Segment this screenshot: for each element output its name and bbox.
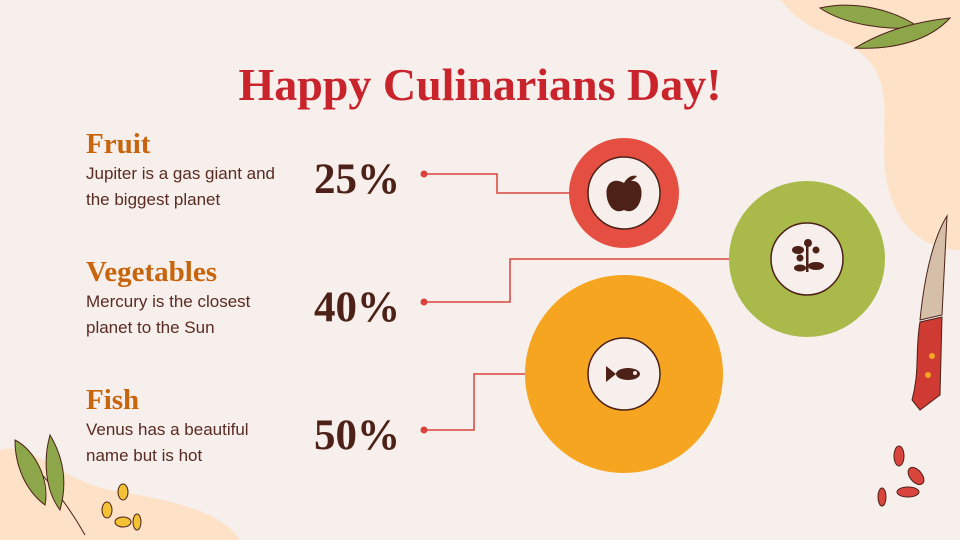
icon: plant [792,239,824,272]
percentage 50: 50% [314,412,400,459]
text block: fish: Venus has a beautiful [86,420,249,439]
text block: fish: name but is hot [86,446,202,465]
text block: fruit: Fruit [86,128,150,160]
text block: vegetables: Mercury is the closest [86,292,250,311]
text block: fish [86,384,249,465]
text block: fruit: the biggest planet [86,190,220,209]
percentage 25: 25% [314,156,400,203]
text block: vegetables: Vegetables [86,256,217,288]
decoration: knife [912,214,948,411]
icon: fish [606,366,640,382]
text block: fruit: Jupiter is a gas giant and [86,164,275,183]
text block: vegetables [86,256,250,337]
icon: apple [606,176,642,211]
percentage 40: 40% [314,284,400,331]
text block: vegetables: planet to the Sun [86,318,215,337]
text block: fish: Fish [86,384,139,416]
title: Happy Culinarians Day! [238,59,722,110]
decoration: leaves top right [818,4,952,49]
text block: fruit [86,128,275,209]
decoration: beans [878,446,924,506]
decoration: leaves bottom left [14,434,142,536]
